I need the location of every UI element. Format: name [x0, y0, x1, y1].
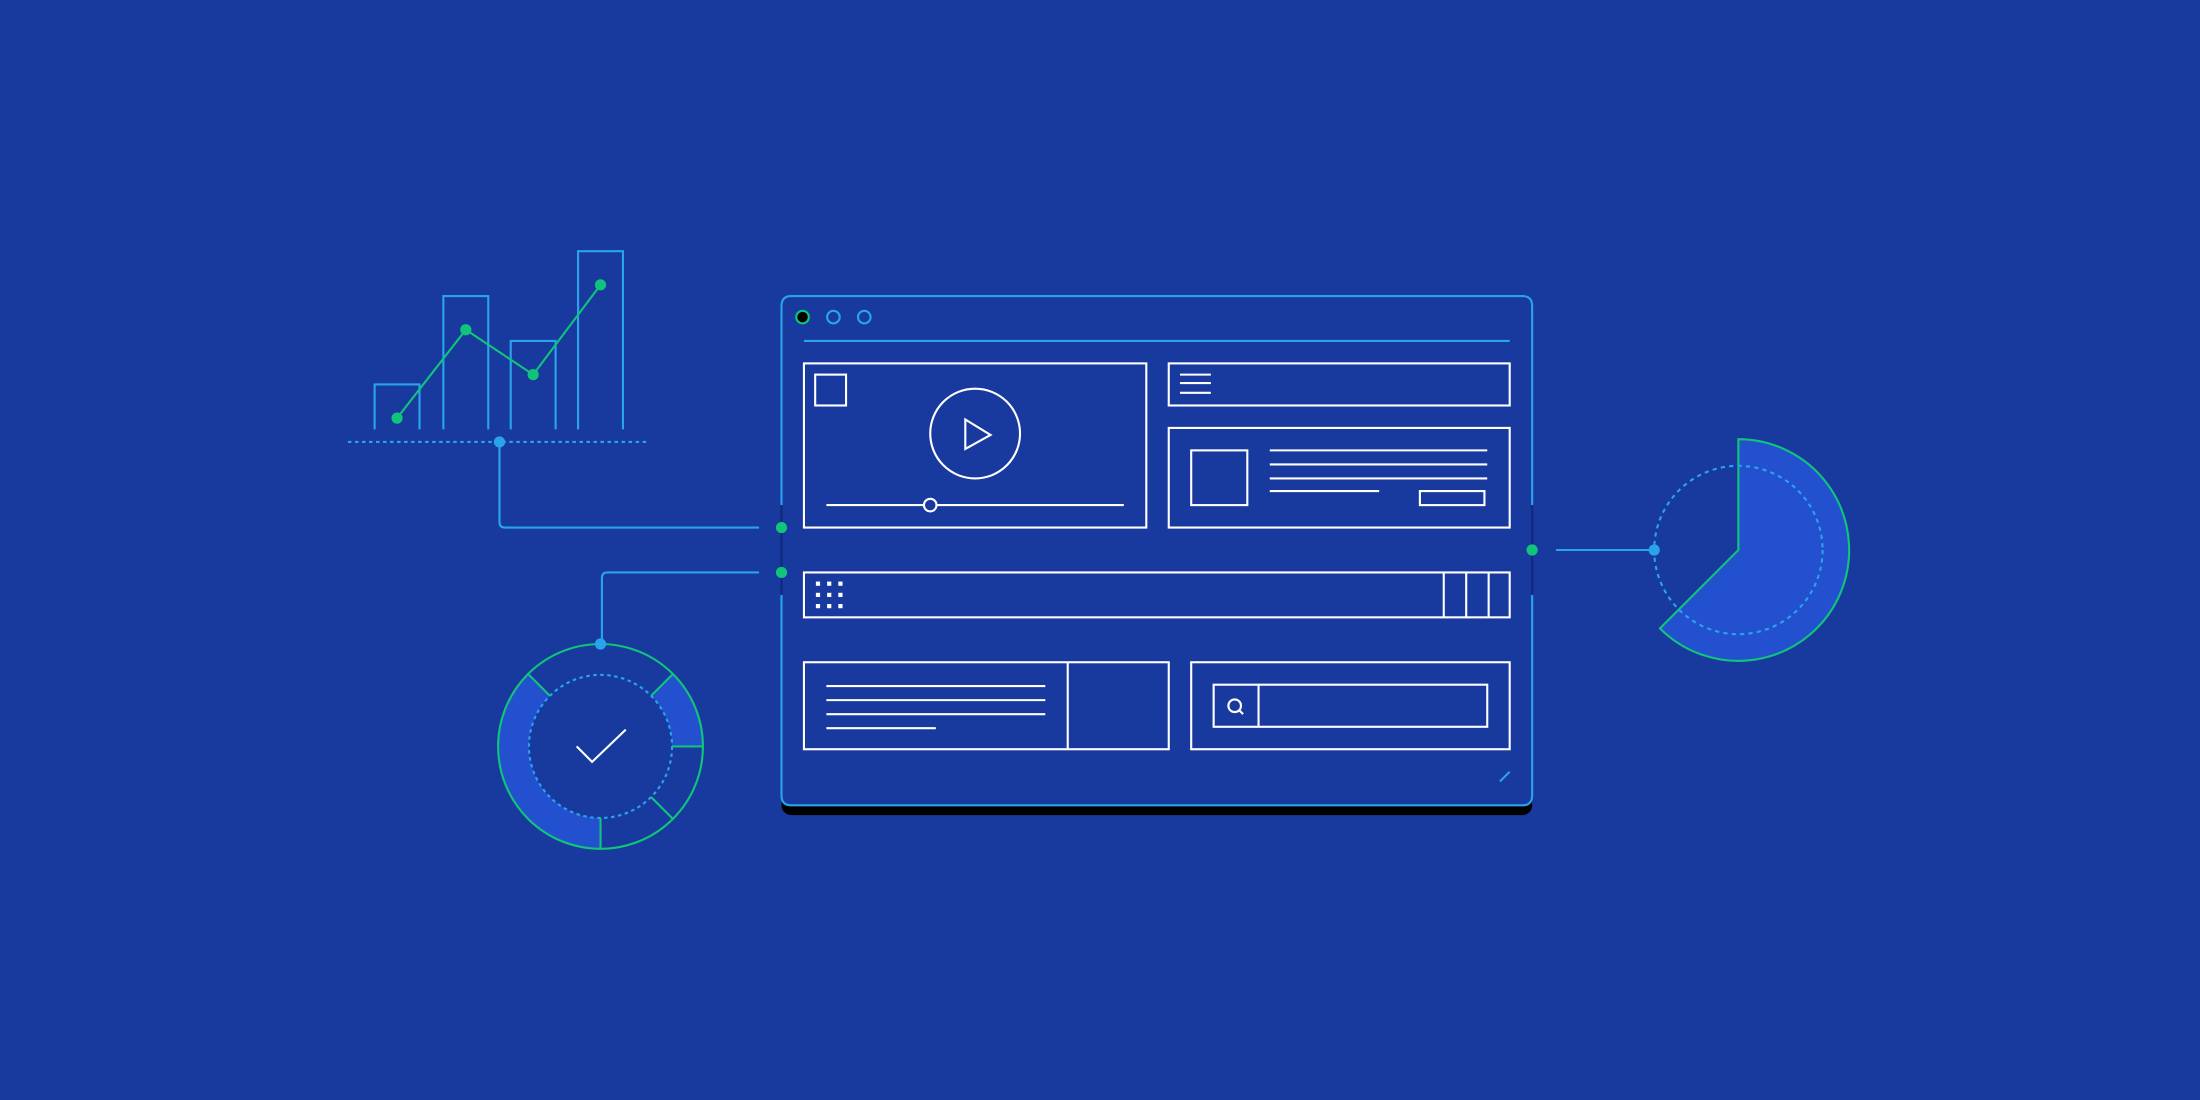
bar chart	[348, 251, 650, 448]
browser window	[776, 296, 1538, 815]
panel: toolbar	[804, 572, 1510, 617]
donut check gauge	[498, 638, 703, 849]
pie chart	[1649, 439, 1849, 661]
panel: search	[1191, 662, 1510, 749]
connector: browser to pie	[1556, 549, 1654, 551]
window controls	[796, 311, 871, 323]
connector: donut to browser	[602, 572, 759, 644]
panel: text block	[804, 662, 1169, 749]
panel: article card	[1169, 428, 1510, 528]
panel: video player	[804, 363, 1146, 528]
connector: chart to browser	[499, 442, 759, 528]
icon: checkmark	[577, 730, 626, 762]
panel: menu header	[1169, 363, 1510, 405]
